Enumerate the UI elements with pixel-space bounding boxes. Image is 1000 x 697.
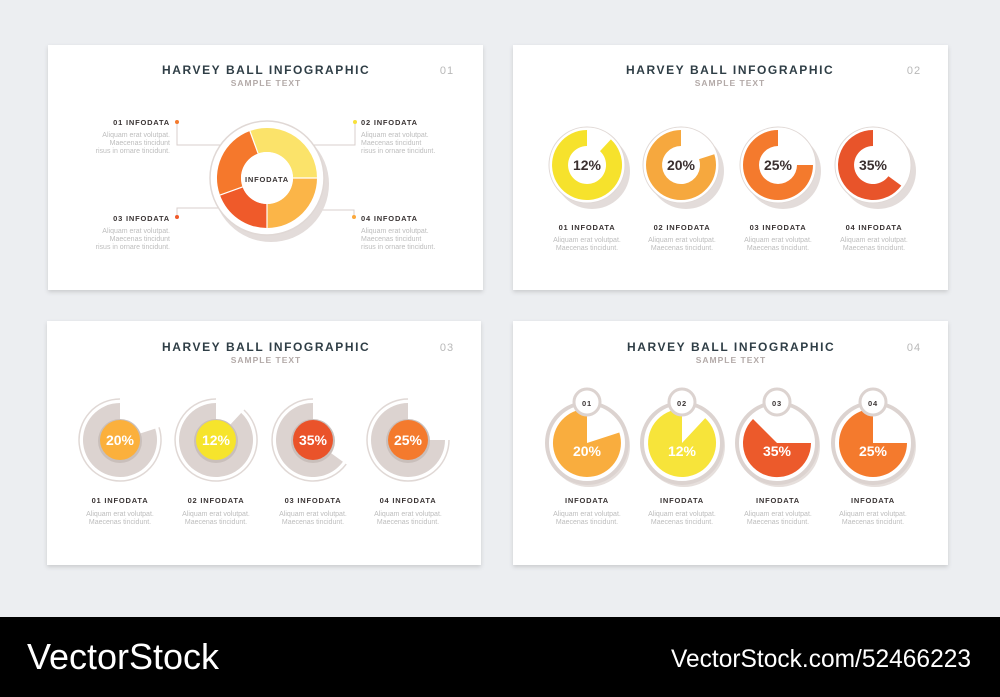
title 3: SAMPLE TEXT <box>231 355 301 365</box>
captions panel 4: Maecenas tincidunt. <box>747 519 809 526</box>
ring 20% <box>643 127 724 209</box>
label 03: risus in ornare tincidunt. <box>96 244 170 251</box>
pie 04 25%: 04 <box>868 399 878 408</box>
ball 25% <box>367 399 449 481</box>
label 01: Aliquam erat volutpat. <box>102 132 170 139</box>
panel 3: pie with inner ball <box>47 321 481 565</box>
label 02: Maecenas tincidunt <box>361 140 421 147</box>
captions panel 4: INFODATA <box>851 496 895 505</box>
pie 02 12%: 02 <box>677 399 687 408</box>
captions panel 4: Maecenas tincidunt. <box>556 519 618 526</box>
captions panel 3: Maecenas tincidunt. <box>185 519 247 526</box>
pie 04 25% <box>833 389 916 487</box>
captions panel 2: 04 INFODATA <box>846 223 902 232</box>
page number 03: 03 <box>440 342 454 354</box>
ball 12% <box>175 399 257 481</box>
captions panel 4: Aliquam erat volutpat. <box>744 511 812 518</box>
pie 04 25%: 25% <box>859 443 888 459</box>
donut chart <box>210 121 329 242</box>
captions panel 2: Aliquam erat volutpat. <box>744 237 812 244</box>
label 02: Aliquam erat volutpat. <box>361 132 429 139</box>
label 01: 01 INFODATA <box>113 118 170 127</box>
ball 20%: 20% <box>106 432 135 448</box>
label 03: 03 INFODATA <box>113 214 170 223</box>
captions panel 3 <box>86 496 442 526</box>
label 03: Aliquam erat volutpat. <box>102 228 170 235</box>
captions panel 3: Aliquam erat volutpat. <box>182 511 250 518</box>
label 02: 02 INFODATA <box>361 118 418 127</box>
pie 01 20%: 20% <box>573 443 602 459</box>
page number 02: 02 <box>907 65 921 77</box>
captions panel 4: INFODATA <box>565 496 609 505</box>
captions panel 4: Maecenas tincidunt. <box>651 519 713 526</box>
footer bar <box>0 617 1000 697</box>
label 04: Maecenas tincidunt <box>361 236 421 243</box>
captions panel 4: Aliquam erat volutpat. <box>839 511 907 518</box>
captions panel 2: Aliquam erat volutpat. <box>840 237 908 244</box>
captions panel 2: 02 INFODATA <box>654 223 710 232</box>
label 04 <box>352 214 435 251</box>
label 01: Maecenas tincidunt <box>110 140 170 147</box>
title 2: HARVEY BALL INFOGRAPHIC <box>626 63 834 77</box>
captions panel 4: INFODATA <box>756 496 800 505</box>
label 02: risus in ornare tincidunt. <box>361 148 435 155</box>
captions panel 4: Aliquam erat volutpat. <box>553 511 621 518</box>
captions panel 2: 03 INFODATA <box>750 223 806 232</box>
ball 35% <box>272 399 346 481</box>
captions panel 3: Aliquam erat volutpat. <box>86 511 154 518</box>
ring 25% <box>740 127 821 209</box>
captions panel 4: Aliquam erat volutpat. <box>648 511 716 518</box>
ring 35% <box>835 127 916 209</box>
captions panel 3: Aliquam erat volutpat. <box>279 511 347 518</box>
ring 20%: 20% <box>667 157 696 173</box>
title 1: HARVEY BALL INFOGRAPHIC <box>162 63 370 77</box>
captions panel 3: Aliquam erat volutpat. <box>374 511 442 518</box>
ball 35%: 35% <box>299 432 328 448</box>
pie 03 35% <box>737 389 820 487</box>
ring 12%: 12% <box>573 157 602 173</box>
footer bar: VectorStock.com/52466223 <box>671 645 971 673</box>
label 01 <box>96 118 179 155</box>
title 1 <box>162 63 370 88</box>
title 4 <box>627 340 835 365</box>
captions panel 2: 01 INFODATA <box>559 223 615 232</box>
title 1: SAMPLE TEXT <box>231 78 301 88</box>
captions panel 3: Maecenas tincidunt. <box>89 519 151 526</box>
captions panel 4: Maecenas tincidunt. <box>842 519 904 526</box>
label 03 <box>96 214 179 251</box>
captions panel 4: INFODATA <box>660 496 704 505</box>
connectors <box>177 122 355 217</box>
label 03: Maecenas tincidunt <box>110 236 170 243</box>
captions panel 3: Maecenas tincidunt. <box>282 519 344 526</box>
captions panel 3: 03 INFODATA <box>285 496 341 505</box>
captions panel 2: Maecenas tincidunt. <box>651 245 713 252</box>
title 2 <box>626 63 834 88</box>
panel 1: donut <box>48 45 483 290</box>
pie 02 12%: 12% <box>668 443 697 459</box>
captions panel 2: Maecenas tincidunt. <box>843 245 905 252</box>
panel 4: pies with number badges <box>513 321 948 565</box>
captions panel 2: Aliquam erat volutpat. <box>553 237 621 244</box>
captions panel 2: Aliquam erat volutpat. <box>648 237 716 244</box>
captions panel 2: Maecenas tincidunt. <box>556 245 618 252</box>
ring 12% <box>549 127 630 209</box>
ring 25%: 25% <box>764 157 793 173</box>
captions panel 4 <box>553 496 907 526</box>
title 2: SAMPLE TEXT <box>695 78 765 88</box>
pie 03 35%: 35% <box>763 443 792 459</box>
ball 12%: 12% <box>202 432 231 448</box>
captions panel 3: Maecenas tincidunt. <box>377 519 439 526</box>
pie 01 20%: 01 <box>582 399 592 408</box>
pie 03 35%: 03 <box>772 399 782 408</box>
title 3: HARVEY BALL INFOGRAPHIC <box>162 340 370 354</box>
captions panel 3: 02 INFODATA <box>188 496 244 505</box>
label 01: risus in ornare tincidunt. <box>96 148 170 155</box>
ball 25%: 25% <box>394 432 423 448</box>
title 3 <box>162 340 370 365</box>
label 04: Aliquam erat volutpat. <box>361 228 429 235</box>
captions panel 3: 01 INFODATA <box>92 496 148 505</box>
pie 01 20% <box>547 389 630 487</box>
page number 01: 01 <box>440 65 454 77</box>
footer bar: VectorStock <box>27 636 220 677</box>
captions panel 2 <box>553 223 908 252</box>
label 02 <box>353 118 435 155</box>
title 4: SAMPLE TEXT <box>696 355 766 365</box>
pie 02 12% <box>642 389 725 487</box>
donut chart: INFODATA <box>245 175 289 184</box>
ball 20% <box>79 399 161 481</box>
title 4: HARVEY BALL INFOGRAPHIC <box>627 340 835 354</box>
label 04: risus in ornare tincidunt. <box>361 244 435 251</box>
label 04: 04 INFODATA <box>361 214 418 223</box>
panel 2: ring balls <box>513 45 948 290</box>
captions panel 2: Maecenas tincidunt. <box>747 245 809 252</box>
captions panel 3: 04 INFODATA <box>380 496 436 505</box>
ring 35%: 35% <box>859 157 888 173</box>
page number 04: 04 <box>907 342 921 354</box>
